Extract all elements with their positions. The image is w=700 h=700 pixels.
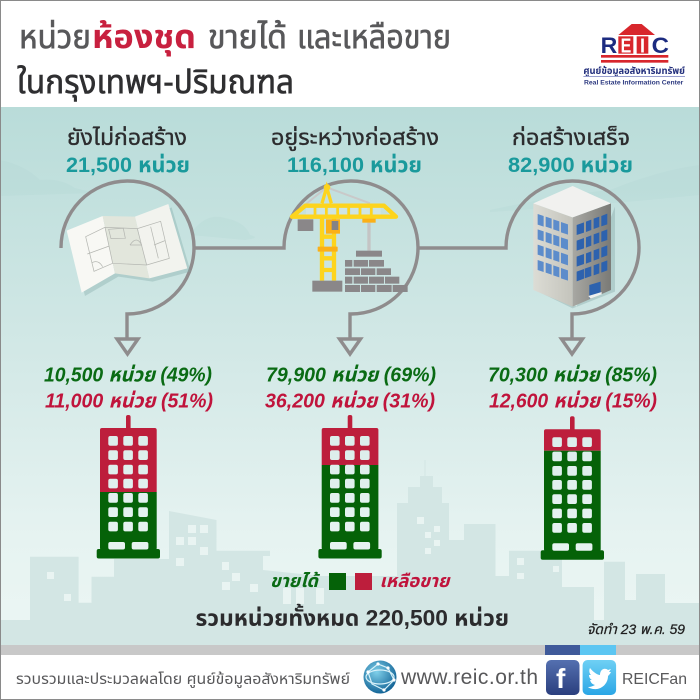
legend: ขายได้ bbox=[270, 571, 321, 591]
icon: facebook: f bbox=[556, 663, 566, 694]
total: รวมหน่วยทั้งหมด 220,500 หน่วย bbox=[196, 603, 509, 630]
icon: globe bbox=[364, 660, 396, 694]
icon: office building bbox=[533, 186, 615, 308]
footer credit: รวบรวมและประมวลผลโดย ศูนย์ข้อมูลอสังหาริมทรัพย์ bbox=[16, 671, 350, 688]
logo: REIC: R bbox=[601, 33, 617, 58]
flow line: connected circles with arrows bbox=[61, 181, 639, 354]
stage 3 heading: 82,900 หน่วย bbox=[508, 154, 633, 177]
date note: จัดทำ 23 พ.ค. 59 bbox=[587, 621, 685, 637]
stage 2 figures: 79,900 หน่วย (69%) bbox=[266, 364, 436, 386]
stage 3 figures: 70,300 หน่วย (85%) bbox=[488, 364, 657, 386]
stage 1 heading: 21,500 หน่วย bbox=[66, 154, 190, 177]
logo: REIC: C bbox=[652, 33, 669, 58]
logo: REIC: Real Estate Information Center bbox=[584, 80, 684, 87]
stage 2 figures: 36,200 หน่วย (31%) bbox=[265, 390, 435, 412]
stage 1 heading bbox=[66, 125, 190, 177]
stage 3 figures: 12,600 หน่วย (15%) bbox=[489, 390, 657, 412]
pictogram building 2: 31% unsold bbox=[318, 415, 382, 558]
title: และเหลือขาย bbox=[297, 18, 451, 55]
icon: twitter bbox=[583, 660, 616, 695]
icon: facebook bbox=[546, 660, 580, 695]
stage 1 figures: 11,000 หน่วย (51%) bbox=[45, 390, 213, 412]
stage 3 heading bbox=[508, 125, 633, 177]
facebook/twitter handle: REICFan bbox=[622, 671, 687, 688]
website: www.reic.or.th bbox=[400, 666, 538, 689]
logo: REIC bbox=[583, 24, 685, 87]
pictogram building 1: 51% unsold bbox=[96, 415, 160, 558]
footer divider bar bbox=[0, 645, 700, 655]
stage 3 figures bbox=[488, 364, 657, 412]
stage 1 figures bbox=[44, 364, 213, 412]
legend: เหลือขาย bbox=[380, 571, 451, 591]
title: ในกรุงเทพฯ-ปริมณฑล bbox=[17, 63, 294, 102]
title bbox=[17, 18, 451, 102]
stage 1 heading: ยังไม่ก่อสร้าง bbox=[67, 125, 187, 150]
stage 2 heading bbox=[271, 125, 439, 177]
icon: tower crane and bricks bbox=[292, 184, 408, 292]
stage 1 figures: 10,500 หน่วย (49%) bbox=[44, 364, 212, 386]
logo: REIC: I bbox=[640, 35, 645, 57]
logo: REIC: ศูนย์ข้อมูลอสังหาริมทรัพย์ bbox=[583, 66, 685, 76]
title: ขายได้ bbox=[208, 18, 287, 55]
title: ห้องชุด bbox=[92, 18, 196, 57]
icon: floor plan map bbox=[67, 204, 191, 296]
logo: REIC: E bbox=[621, 35, 631, 57]
stage 2 figures bbox=[265, 364, 436, 412]
title: หน่วย bbox=[19, 18, 91, 55]
city skyline bbox=[0, 460, 700, 645]
stage 2 heading: 116,100 หน่วย bbox=[287, 154, 422, 177]
teal gradient panel bbox=[0, 107, 700, 645]
stage 3 heading: ก่อสร้างเสร็จ bbox=[512, 125, 630, 150]
pictogram building 3: 15% unsold bbox=[540, 416, 604, 560]
clouds bbox=[0, 160, 700, 240]
legend bbox=[270, 571, 451, 591]
stage 2 heading: อยู่ระหว่างก่อสร้าง bbox=[271, 125, 439, 151]
